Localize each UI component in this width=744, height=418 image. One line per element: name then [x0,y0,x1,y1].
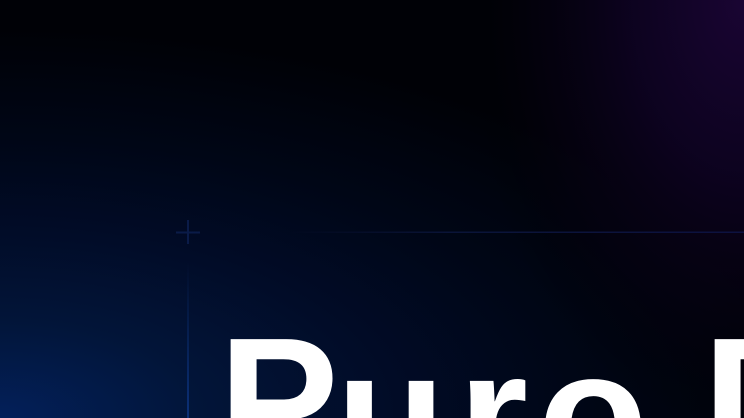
vertical line [187,262,189,418]
icon: plus cross mark [176,220,200,244]
horizontal line [290,232,744,233]
